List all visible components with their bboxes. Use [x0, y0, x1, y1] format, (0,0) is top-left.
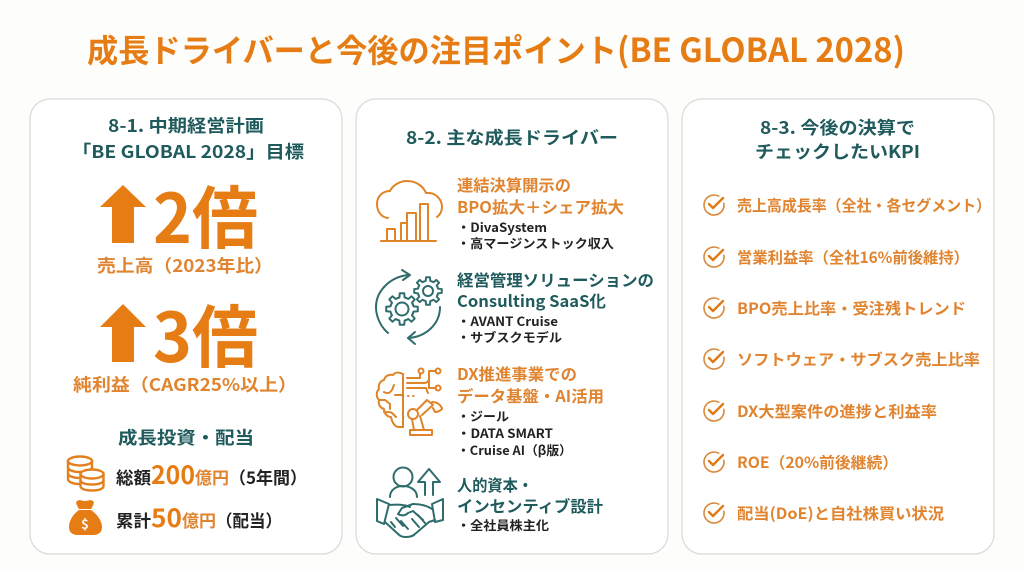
- label: net profit: 純利益（CAGR25%以上）: [73, 372, 297, 397]
- driver 3 title: DX推進事業での: [457, 361, 577, 385]
- driver 3 title: [457, 361, 604, 407]
- driver 4 title: [457, 472, 603, 517]
- icon: brain and robot arm: [377, 368, 442, 435]
- icon: up arrow 3x: [100, 304, 146, 362]
- driver 2 items: ・AVANT Cruise: [457, 311, 558, 330]
- driver 3 items: [457, 406, 572, 459]
- driver 2 title: 経営管理ソリューションの: [457, 267, 654, 291]
- text: cumulative 50 oku yen: 億円: [182, 507, 216, 532]
- driver 3 title: データ基盤・AI活用: [457, 383, 604, 407]
- text: cumulative 50 oku yen: （配当）: [216, 507, 282, 532]
- icon: coins: [68, 456, 104, 490]
- driver 1 title: 連結決算開示の: [457, 172, 571, 196]
- driver 2 title: [457, 267, 654, 312]
- heading: 8-1: 「BE GLOBAL 2028」目標: [72, 139, 305, 164]
- text: total 200 oku yen: [116, 456, 307, 492]
- KPI 2: 営業利益率（全社16%前後維持）: [737, 246, 969, 268]
- text: total 200 oku yen: 200: [151, 456, 195, 492]
- driver 1 title: BPO拡大＋シェア拡大: [457, 194, 624, 218]
- text: total 200 oku yen: 億円: [195, 464, 229, 489]
- KPI 3: BPO売上比率・受注残トレンド: [737, 297, 966, 319]
- label: sales: 売上高（2023年比）: [97, 253, 273, 278]
- heading: 8-3: [755, 115, 920, 164]
- panel: 8-3 KPIs to check: [682, 99, 994, 554]
- driver 3 items: ・ジール: [457, 406, 510, 425]
- metric: 2倍: 2倍: [153, 164, 258, 263]
- text: cumulative 50 oku yen: [116, 499, 282, 535]
- driver 1 title: [457, 172, 624, 218]
- title: [87, 24, 905, 72]
- title: 成長ドライバーと今後の注目ポイント: [87, 26, 617, 72]
- driver 3 items: ・Cruise AI（β版）: [457, 440, 572, 459]
- driver 1 items: ・DivaSystem: [457, 217, 547, 236]
- KPI 4: ソフトウェア・サブスク売上比率: [737, 348, 980, 370]
- title: (BE GLOBAL 2028): [617, 24, 905, 72]
- icon: person, arrow and handshake: [377, 468, 443, 537]
- icon: cloud with bars: [377, 181, 442, 241]
- driver 4 title: インセンティブ設計: [457, 493, 603, 517]
- KPI 1: 売上高成長率（全社・各セグメント）: [737, 194, 991, 216]
- icon: money bag: [69, 500, 102, 535]
- heading: growth investment and dividends: 成長投資・配当: [118, 425, 254, 450]
- metric: 3倍: 3倍: [153, 283, 258, 382]
- icon: gears with cycle arrows: [376, 270, 442, 344]
- driver 2 items: ・サブスクモデル: [457, 327, 563, 346]
- text: cumulative 50 oku yen: 累計: [116, 507, 151, 532]
- text: total 200 oku yen: （5年間）: [229, 464, 307, 489]
- KPI 7: 配当(DoE)と自社株買い状況: [737, 502, 945, 524]
- heading: 8-1: [72, 113, 305, 164]
- heading: 8-3: チェックしたいKPI: [755, 139, 920, 164]
- heading: 8-3: 8-3. 今後の決算で: [760, 115, 915, 140]
- driver 4 items: ・全社員株主化: [457, 515, 550, 534]
- driver 2 items: [457, 311, 563, 346]
- heading: 8-2: 8-2. 主な成長ドライバー: [406, 125, 618, 150]
- driver 2 title: Consulting SaaS化: [457, 288, 606, 312]
- heading: 8-1: 8-1. 中期経営計画: [108, 113, 264, 138]
- driver 3 items: ・DATA SMART: [457, 423, 553, 442]
- KPI 6: ROE（20%前後継続）: [737, 451, 898, 473]
- driver 4 title: 人的資本・: [457, 472, 533, 496]
- KPI 5: DX大型案件の進捗と利益率: [737, 400, 937, 422]
- icon: up arrow 2x: [100, 185, 146, 243]
- text: cumulative 50 oku yen: 50: [151, 499, 182, 535]
- panel: 8-1 mid-term plan targets: [30, 99, 342, 554]
- driver 1 items: ・高マージンストック収入: [457, 233, 615, 252]
- panel: 8-2 growth drivers: [356, 99, 668, 554]
- driver 1 items: [457, 217, 615, 252]
- icon: money bag: $: [81, 514, 89, 533]
- text: total 200 oku yen: 総額: [116, 464, 151, 489]
